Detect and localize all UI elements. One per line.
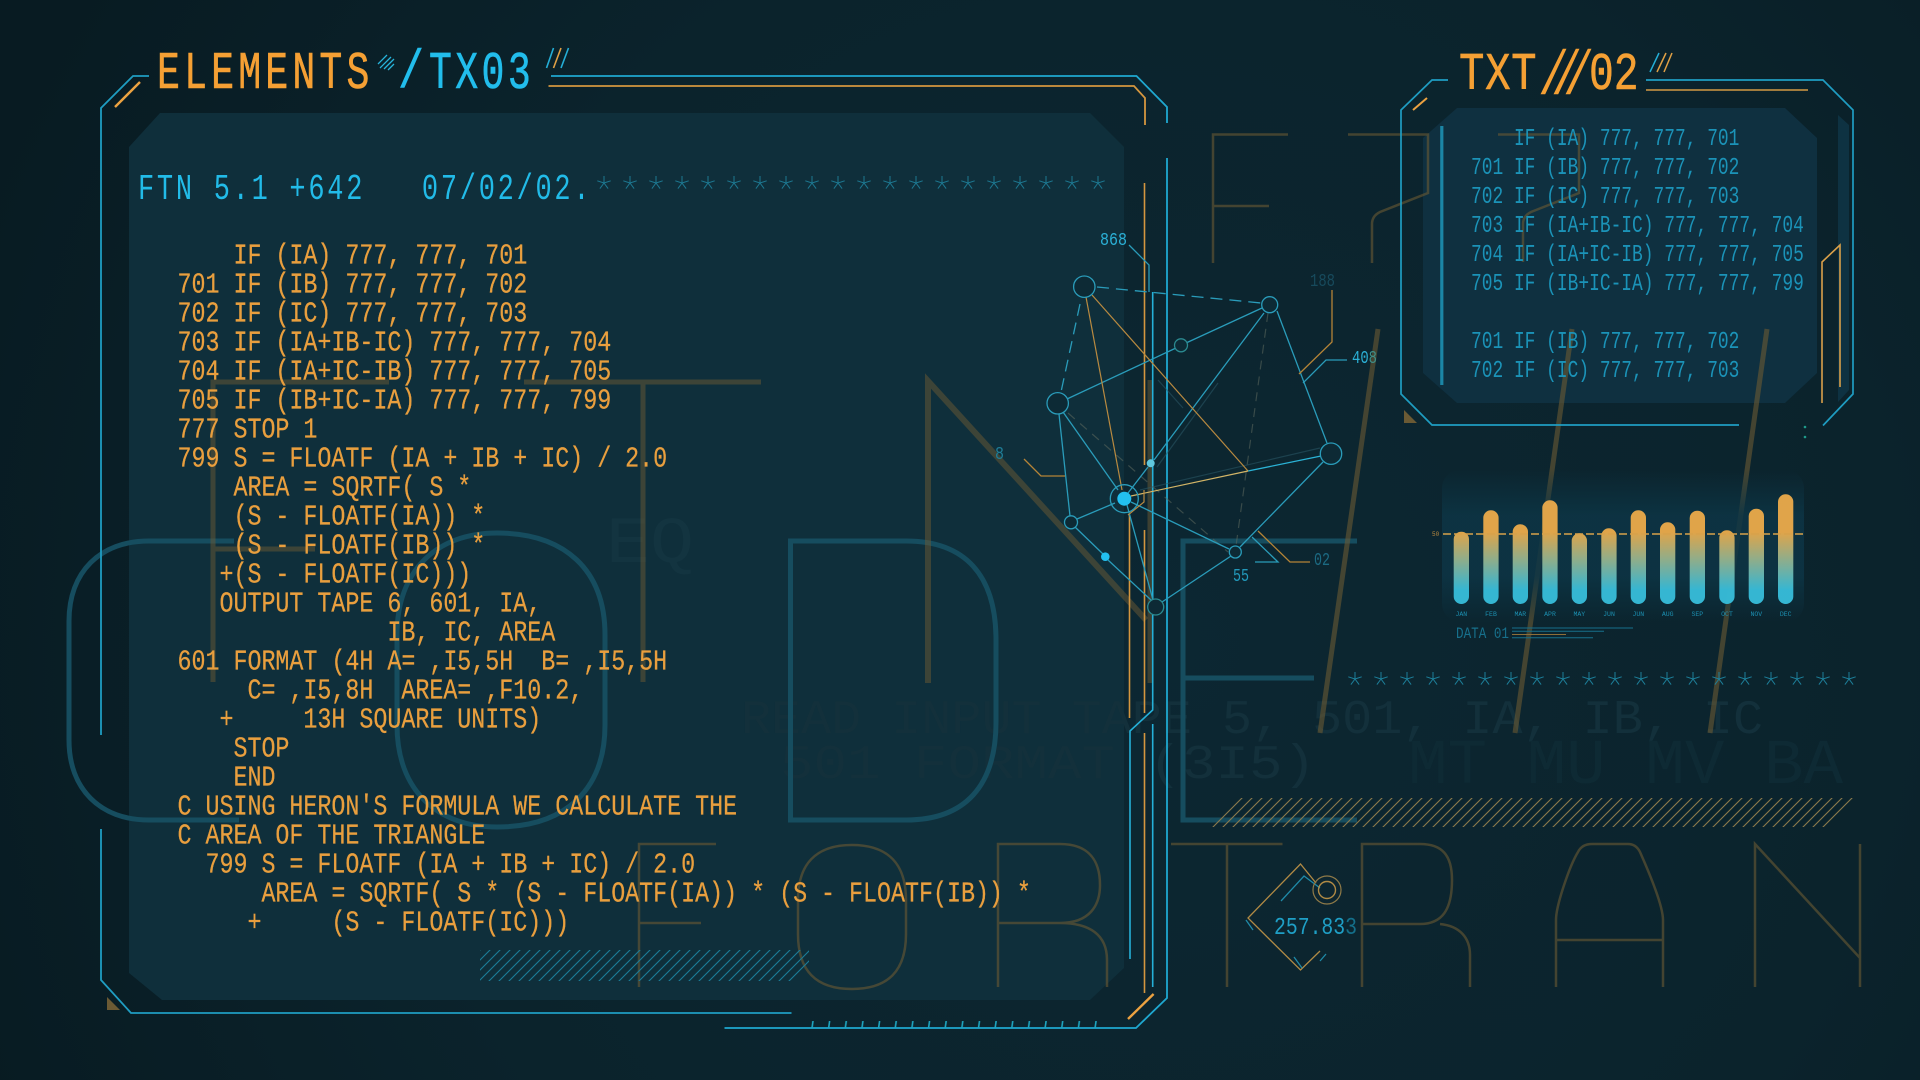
callout: 55: 55: [1233, 567, 1249, 587]
code listing: Fortran: C AREA OF THE TRIANGLE: [178, 819, 485, 852]
title: slashes and 02: [1541, 46, 1639, 106]
month labels: AUG: [1662, 611, 1674, 618]
chart backdrop: [1442, 470, 1804, 622]
text listing: right panel: 702 IF (IC) 777, 777, 703: [1471, 184, 1739, 211]
text listing: right panel: 701 IF (IB) 777, 777, 702: [1471, 329, 1739, 356]
orange connections: [1086, 295, 1248, 515]
month labels: JUN: [1632, 611, 1644, 618]
text listing: right panel: [1471, 126, 1804, 385]
code listing: Fortran: C USING HERON'S FORMULA WE CALCULATE THE: [178, 790, 737, 823]
callout: 408: 408: [1352, 349, 1377, 369]
faint background text: EQ: EQ: [606, 507, 694, 582]
code listing: Fortran: STOP: [178, 732, 289, 765]
threshold line: [1443, 533, 1804, 535]
code listing: Fortran: 702 IF (IC) 777, 777, 703: [178, 297, 527, 330]
big letters: CODE outline: [69, 533, 1357, 827]
frame: right panel lines: [1401, 80, 1853, 438]
month labels: DEC: [1780, 611, 1792, 618]
faint background text: format statement: 501 FORMAT (3I5): [780, 739, 1316, 793]
title: ELEMENTS: ELEMENTS: [157, 44, 374, 104]
code listing: Fortran: + (S - FLOATF(IC))): [178, 906, 569, 939]
callout: 868: 868: [1100, 231, 1127, 251]
code listing: Fortran: 799 S = FLOATF (IA + IB + IC) / 2.0: [178, 848, 695, 881]
callout: 02: 02: [1314, 551, 1330, 571]
month labels: [1455, 611, 1792, 618]
month labels: FEB: [1485, 611, 1497, 618]
big letters: upper right F and 7 shapes: [1213, 134, 1579, 263]
hatch: lower right: [1207, 798, 1859, 827]
faint background text: read statement: READ INPUT TAPE 5, 501, IA, IB, IC: [741, 694, 1763, 748]
title: slash: /: [398, 42, 424, 104]
month labels: NOV: [1750, 611, 1762, 618]
threshold label: 50: [1432, 531, 1440, 538]
month labels: MAR: [1514, 611, 1526, 618]
title: slashes and 02: 02: [1589, 46, 1639, 106]
nodes: [1047, 276, 1342, 615]
big diagonal slashes: [1320, 329, 1767, 733]
text listing: right panel: 702 IF (IC) 777, 777, 703: [1471, 358, 1739, 385]
panel: code background: [129, 113, 1124, 1000]
text listing: right panel: 705 IF (IB+IC-IA) 777, 777, 799: [1471, 271, 1804, 298]
code listing: Fortran: (S - FLOATF(IB)) *: [178, 529, 485, 562]
value: 257.833: 257.833: [1274, 915, 1357, 942]
title slashes: [546, 48, 568, 68]
month labels: JAN: [1455, 611, 1467, 618]
text listing: right panel: 703 IF (IA+IB-IC) 777, 777, 704: [1471, 213, 1804, 240]
mini hatch: [378, 55, 394, 70]
code listing: Fortran: END: [178, 761, 275, 794]
title: TX03: TX03: [429, 44, 534, 104]
code listing: Fortran: OUTPUT TAPE 6, 601, IA,: [178, 587, 541, 620]
text listing: right panel: 704 IF (IA+IC-IB) 777, 777, 705: [1471, 242, 1804, 269]
faint background text: mnemonics: MT MU MV BA: [1408, 731, 1844, 803]
code listing: Fortran: 701 IF (IB) 777, 777, 702: [178, 268, 527, 301]
big letters: FORTRAN outline: [639, 844, 1860, 989]
text listing: right panel: 701 IF (IB) 777, 777, 702: [1471, 155, 1739, 182]
month labels: APR: [1544, 611, 1556, 618]
code listing: Fortran: [178, 239, 1031, 939]
callout: 408: [1303, 349, 1377, 383]
code listing: Fortran: IF (IA) 777, 777, 701: [178, 239, 527, 272]
header: FTN line: FTN 5.1 +642 07/02/02.: [138, 170, 592, 210]
network graph: [1047, 276, 1342, 615]
callout: 55: [1233, 537, 1278, 587]
code listing: Fortran: 777 STOP 1: [178, 413, 317, 446]
tick marks: [807, 1021, 1107, 1028]
code listing: Fortran: 601 FORMAT (4H A= ,I5,5H B= ,I5,5H: [178, 645, 667, 678]
callout: 02: [1258, 531, 1330, 571]
text listing: right panel: IF (IA) 777, 777, 701: [1471, 126, 1739, 153]
title: TXT: TXT: [1459, 46, 1537, 106]
month labels: SEP: [1691, 611, 1703, 618]
callout: 188: [1299, 272, 1335, 374]
callout: 8: 8: [995, 445, 1004, 465]
side sliver: [1838, 115, 1849, 402]
hatch: code panel: [480, 950, 809, 981]
code listing: Fortran: AREA = SQRTF( S * (S - FLOATF(IA)) * (S - FLOATF(IB)) *: [178, 877, 1031, 910]
callout: 8: [995, 445, 1065, 476]
code listing: Fortran: 704 IF (IA+IC-IB) 777, 777, 705: [178, 355, 611, 388]
big letters: FT and N outline: [213, 380, 1150, 683]
code listing: Fortran: (S - FLOATF(IA)) *: [178, 500, 485, 533]
code listing: Fortran: + 13H SQUARE UNITS): [178, 703, 541, 736]
bar chart: [1432, 470, 1804, 622]
stars row: top: [591, 171, 1111, 195]
code listing: Fortran: 705 IF (IB+IC-IA) 777, 777, 799: [178, 384, 611, 417]
month labels: JUN: [1603, 611, 1615, 618]
month labels: MAY: [1573, 611, 1585, 618]
diamond gauge icon: [1246, 864, 1341, 970]
code listing: Fortran: +(S - FLOATF(IC))): [178, 558, 471, 591]
month labels: OCT: [1721, 611, 1733, 618]
panel: text listing background: [1423, 108, 1817, 403]
cyan connections: [1059, 287, 1327, 602]
code listing: Fortran: C= ,I5,8H AREA= ,F10.2,: [178, 674, 583, 707]
callout: 868: [1100, 231, 1149, 292]
callout: 188: 188: [1310, 272, 1335, 292]
frame: main panel lines: [101, 76, 1167, 1028]
bars: [1454, 494, 1793, 604]
dim connections: [1068, 313, 1320, 552]
chart caption: DATA 01: DATA 01: [1456, 625, 1509, 643]
code listing: Fortran: AREA = SQRTF( S *: [178, 471, 471, 504]
chart caption: DATA 01: [1456, 625, 1633, 643]
title slashes right: [1650, 53, 1672, 72]
code listing: Fortran: IB, IC, AREA: [178, 616, 555, 649]
stars row: lower right: [1342, 667, 1862, 691]
code listing: Fortran: 703 IF (IA+IB-IC) 777, 777, 704: [178, 326, 611, 359]
code listing: Fortran: 799 S = FLOATF (IA + IB + IC) / 2.0: [178, 442, 667, 475]
